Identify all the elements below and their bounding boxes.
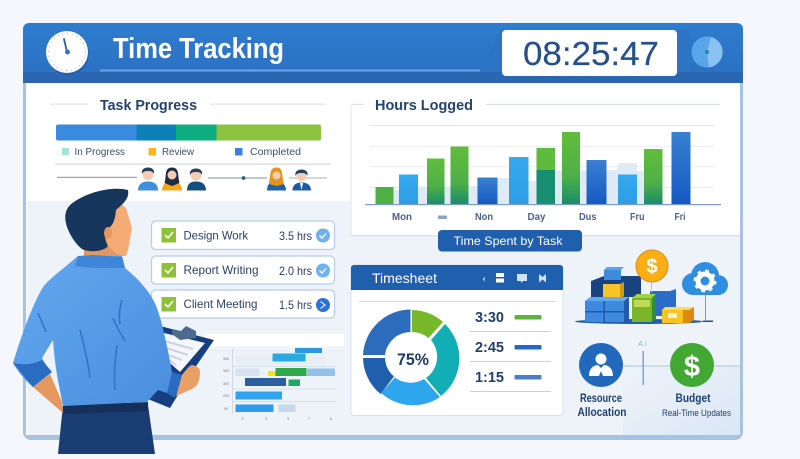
left forearm: [33, 374, 63, 413]
donut chart: [363, 310, 459, 405]
axis labels: Fru: [630, 212, 644, 223]
belt: [63, 402, 148, 414]
shirt creases: [38, 300, 125, 390]
gantt chart: 300: [223, 357, 229, 361]
icon: person 4: [267, 168, 286, 190]
icon: person 2: [162, 168, 182, 190]
collar: [75, 255, 125, 268]
right cuff: [167, 372, 182, 398]
hair: [65, 189, 128, 251]
button: time spent by task: Time Spent by Task: [454, 234, 564, 248]
time rows: 1:15: [475, 370, 504, 386]
team members: [57, 168, 327, 190]
budget: $: [684, 351, 700, 383]
legend: In Progress: [74, 146, 125, 158]
task list: [152, 221, 334, 318]
time rows: 3:30: [475, 310, 504, 326]
stacked progress bar: [56, 124, 321, 140]
gantt chart: 3: [265, 417, 267, 421]
task: client meeting: [152, 290, 334, 318]
connector lines: A.I: [638, 341, 647, 348]
panel: hours logged: [350, 97, 740, 236]
task: report writing: Report Writing: [184, 263, 258, 277]
hand: [176, 365, 200, 396]
time rows: [470, 310, 551, 392]
shirt: [13, 256, 172, 406]
budget: Real-Time Updates: [662, 408, 731, 419]
axis labels: Mon: [392, 212, 412, 223]
budget: [662, 343, 731, 419]
heading: task progress: Task Progress: [100, 97, 197, 114]
gantt chart: 200: [223, 394, 229, 398]
icon: dollar coin: $: [646, 256, 658, 278]
header bar: [23, 23, 743, 83]
legend: [62, 146, 301, 158]
task: report writing: [152, 256, 334, 284]
illustration: stacked boxes: [575, 267, 713, 324]
icon: dollar coin: [636, 250, 668, 292]
gantt chart: 0: [242, 417, 244, 421]
icon: small timer dial: [692, 36, 723, 68]
icon: person 5: [292, 170, 311, 190]
clipboard: [138, 326, 214, 408]
digital timer: 08:25:47: [523, 35, 659, 72]
time rows: 2:45: [475, 340, 504, 356]
panel: timesheet: [351, 265, 563, 416]
panel: task progress: [50, 97, 331, 190]
icon: cloud gear: [682, 262, 728, 321]
gantt chart: 7: [308, 417, 310, 421]
left cuff: [13, 360, 52, 387]
gantt chart: [205, 334, 344, 421]
task: design work: 3.5 hrs: [279, 229, 312, 243]
neck and face: [84, 203, 132, 256]
illustration: man with clipboard: [13, 189, 214, 454]
icon: wall clock: [46, 31, 89, 75]
bar chart: [365, 125, 721, 223]
donut percentage: 75%: [397, 350, 429, 369]
resource allocation: Allocation: [578, 407, 626, 419]
heading: hours logged: Hours Logged: [375, 97, 473, 114]
legend: Review: [162, 146, 194, 158]
trousers: [58, 405, 155, 454]
axis labels: Day: [528, 212, 546, 223]
timesheet header: [351, 265, 563, 290]
icon: person 1: [138, 168, 158, 190]
axis labels: Dus: [579, 212, 597, 223]
budget: Budget: [676, 393, 711, 405]
gantt chart: 300: [223, 382, 229, 386]
gantt chart: 90: [224, 407, 228, 411]
task: design work: [152, 221, 334, 250]
digital timer: [502, 30, 677, 76]
task: client meeting: Client Meeting: [184, 297, 258, 311]
gantt chart: 8: [330, 417, 332, 421]
task: design work: Design Work: [184, 228, 249, 242]
ear: [104, 227, 112, 239]
timesheet header: Timesheet: [372, 270, 437, 286]
gantt chart: 300: [223, 369, 229, 373]
task: client meeting: 1.5 hrs: [279, 298, 312, 312]
task: report writing: 2.0 hrs: [279, 264, 312, 278]
title: Time Tracking: [113, 33, 284, 65]
axis labels: Non: [475, 212, 493, 223]
gantt chart: 3: [287, 417, 289, 421]
axis labels: [392, 212, 686, 223]
connector lines: [620, 341, 740, 385]
button: time spent by task: [438, 230, 582, 252]
icon: person 3: [187, 168, 206, 190]
resource allocation: Resource: [580, 393, 622, 405]
axis labels: Fri: [674, 212, 686, 223]
resource allocation: [578, 343, 626, 419]
legend: Completed: [250, 146, 301, 158]
